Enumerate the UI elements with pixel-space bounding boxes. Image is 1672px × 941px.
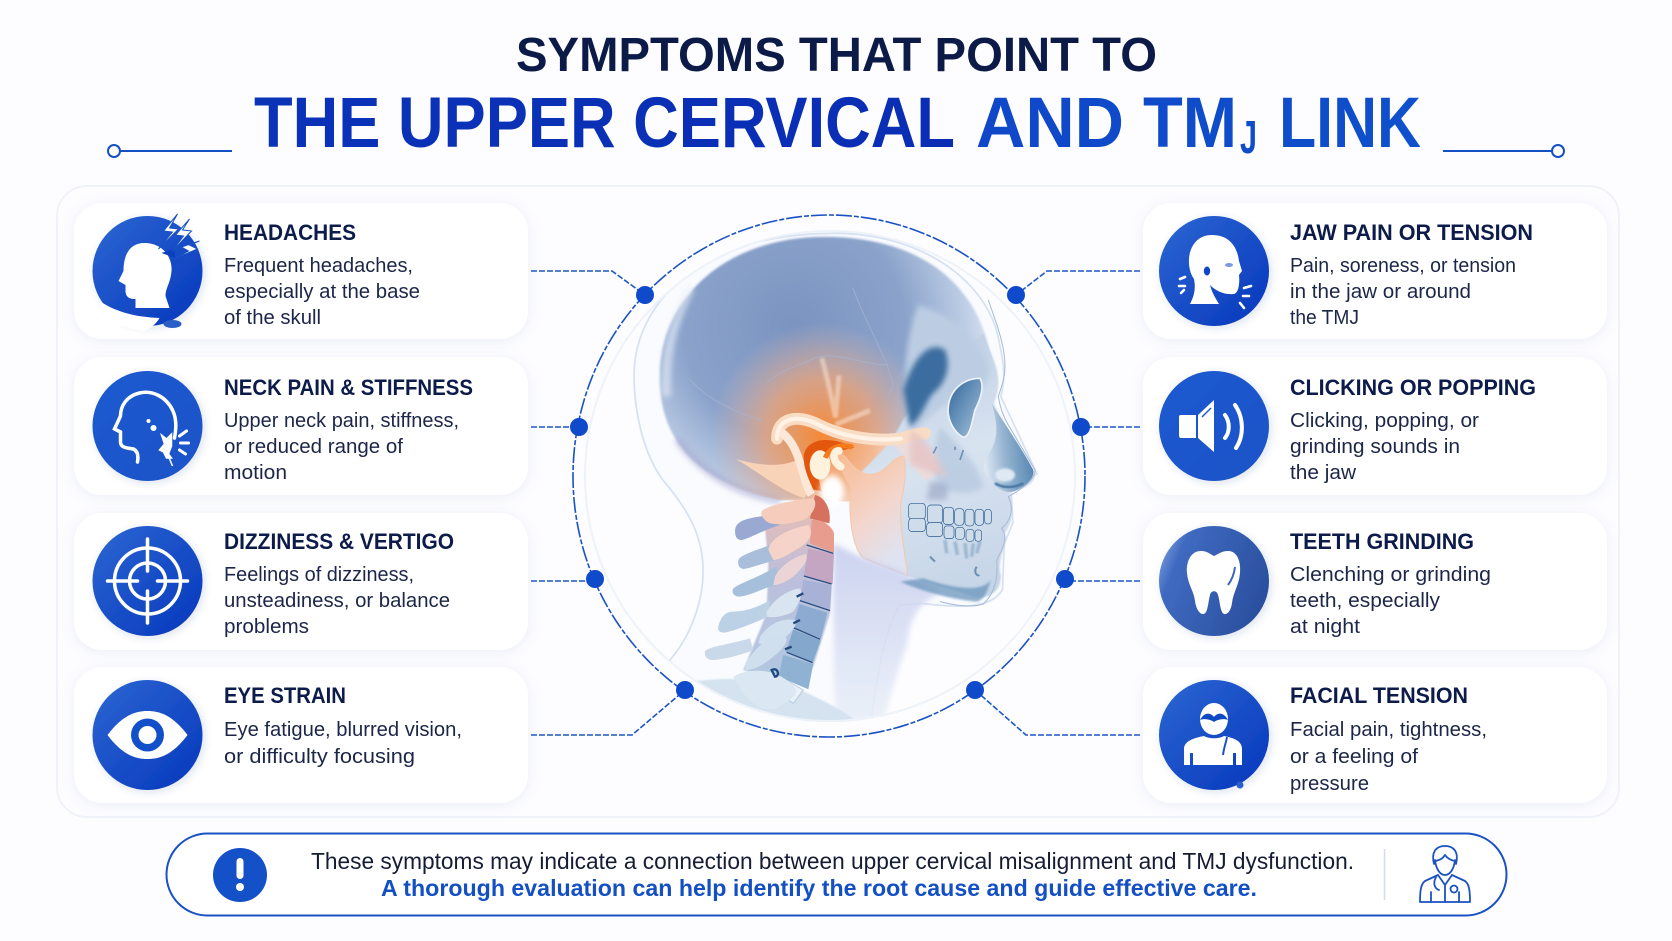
description: teeth, especially	[1290, 590, 1440, 612]
description: or difficulty focusing	[224, 746, 415, 768]
icon: head with lightning	[92, 214, 202, 331]
neck shading	[833, 543, 940, 733]
orange inflammation glow	[719, 328, 907, 502]
description: Pain, soreness, or tension	[1290, 255, 1516, 277]
icon: crosshair target	[92, 526, 202, 636]
cervical spine	[680, 495, 940, 733]
icon: neck outline	[92, 371, 202, 481]
description	[1290, 719, 1487, 795]
heading: TEETH GRINDING	[1290, 529, 1474, 554]
central illustration: skull, TMJ and cervical spine	[634, 233, 1037, 733]
description: Clicking, popping, or	[1290, 410, 1479, 432]
heading: HEADACHES	[224, 220, 356, 245]
description: at night	[1290, 616, 1360, 638]
mandible	[834, 453, 908, 575]
occipital lavender edge	[677, 439, 780, 500]
panel: clicking card	[1143, 357, 1607, 495]
description: especially at the base	[224, 281, 420, 303]
description	[1290, 410, 1479, 484]
TMJ inflamed joint	[804, 440, 854, 491]
description: the jaw	[1290, 462, 1357, 484]
title line two: J	[1240, 111, 1257, 163]
lower teeth roots	[945, 540, 980, 558]
temple shadow	[903, 347, 948, 427]
icon: tooth	[1159, 526, 1269, 636]
title line two: TM	[1143, 84, 1237, 163]
heading: DIZZINESS & VERTIGO	[224, 529, 454, 554]
description: motion	[224, 462, 287, 484]
ring: faint inner ring	[585, 231, 1075, 721]
teeth	[909, 503, 991, 541]
panel: neck pain card	[74, 357, 528, 495]
heading: JAW PAIN OR TENSION	[1290, 220, 1533, 245]
connector nodes	[570, 286, 1090, 699]
ring: dashed outer ring	[573, 215, 1085, 737]
description: Facial pain, tightness,	[1290, 719, 1487, 741]
panel: headaches card	[74, 203, 528, 339]
spine column backing	[743, 497, 833, 680]
callout text line two: A thorough evaluation can help identify the root cause and guide effective care.	[381, 875, 1257, 901]
panel: jaw pain card	[1143, 203, 1607, 339]
facial profile line	[940, 300, 1035, 606]
description: Upper neck pain, stiffness,	[224, 410, 459, 432]
icon: doctor	[1420, 846, 1470, 902]
heading: FACIAL TENSION	[1290, 683, 1468, 708]
spinous processes	[735, 515, 780, 540]
description	[224, 564, 450, 638]
description	[224, 719, 462, 768]
mid-face shading	[934, 427, 983, 493]
forehead blend	[905, 305, 989, 432]
heading: CLICKING OR POPPING	[1290, 375, 1536, 400]
description: in the jaw or around	[1290, 281, 1471, 303]
panel: eye strain card	[74, 667, 528, 803]
description: Eye fatigue, blurred vision,	[224, 719, 462, 741]
title line two: THE UPPER CERVICAL	[254, 84, 955, 163]
description	[224, 410, 459, 484]
vertebral arches	[761, 498, 815, 524]
eye socket	[948, 378, 982, 437]
description: grinding sounds in	[1290, 436, 1460, 458]
icon: head with jaw	[1159, 216, 1269, 326]
shoulder bones	[698, 678, 853, 722]
title line two: AND	[976, 84, 1124, 163]
description: pressure	[1290, 773, 1369, 795]
cranium	[660, 237, 992, 500]
head silhouette	[633, 232, 1038, 662]
description: Clenching or grinding	[1290, 564, 1491, 586]
description	[1290, 564, 1491, 638]
cheekbone	[894, 442, 935, 480]
icon: person with face tension	[1159, 680, 1269, 790]
nasal aperture	[984, 403, 1034, 492]
icon: eye	[92, 680, 202, 790]
callout text line one: These symptoms may indicate a connection between upper cervical misalignment and TMJ dysfunction.	[311, 848, 1354, 874]
description: of the skull	[224, 307, 321, 329]
title rule left	[108, 145, 232, 157]
cheek tint	[910, 430, 947, 477]
description: Frequent headaches,	[224, 255, 413, 277]
connector lines	[531, 271, 1140, 735]
title line two: LINK	[1279, 84, 1421, 163]
description: or a feeling of	[1290, 746, 1418, 768]
panel: symptoms frame	[57, 186, 1619, 817]
description: the TMJ	[1290, 307, 1359, 329]
face bones	[851, 333, 1035, 597]
heading: NECK PAIN & STIFFNESS	[224, 375, 473, 400]
zygomatic arch	[777, 419, 925, 440]
title line one: SYMPTOMS THAT POINT TO	[516, 29, 1157, 82]
icon: speaker	[1159, 371, 1269, 481]
panel: facial tension card	[1143, 667, 1607, 803]
skull sutures	[689, 288, 893, 421]
title rule right	[1443, 145, 1564, 157]
jaw underside shading	[900, 578, 991, 602]
panel: teeth grinding card	[1143, 513, 1607, 650]
heading: EYE STRAIN	[224, 683, 346, 708]
description	[224, 255, 420, 329]
description: problems	[224, 616, 309, 638]
title	[254, 29, 1421, 163]
divider	[1384, 849, 1386, 900]
description: Feelings of dizziness,	[224, 564, 414, 586]
description: unsteadiness, or balance	[224, 590, 450, 612]
vertebral bodies	[810, 495, 830, 523]
icon: exclamation	[213, 848, 267, 902]
callout: evaluation banner	[166, 834, 1506, 916]
panel: dizziness card	[74, 513, 528, 650]
title line two	[254, 84, 1421, 163]
description	[1290, 255, 1516, 329]
face details	[900, 300, 1035, 606]
description: or reduced range of	[224, 436, 403, 458]
